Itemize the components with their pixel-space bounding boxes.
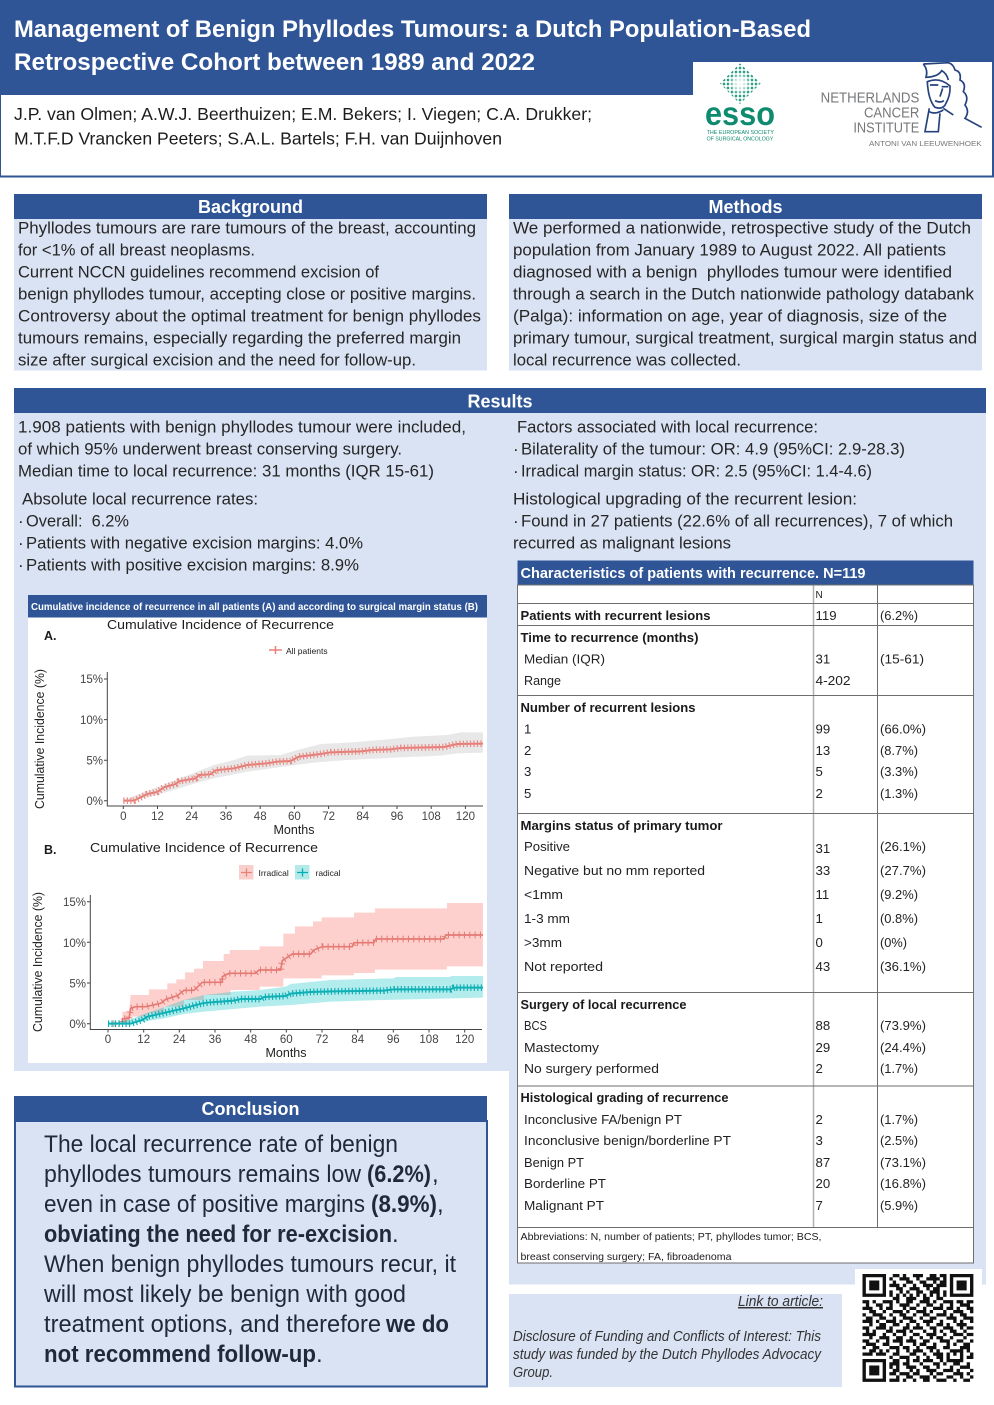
header band [0,0,994,176]
chart A: 84 [356,811,370,823]
table abbreviations: Abbreviations: N, number of patients; PT, phyllodes tumor; BCS, [520,1231,822,1243]
conclusion text [43,1131,456,1368]
background text: Controversy about the optimal treatment for benign phyllodes [18,307,481,326]
table group: surgery: (73.9%) [880,1018,926,1033]
table group: surgery: (24.4%) [880,1040,926,1055]
table group: margin status: 31 [816,841,830,856]
table group: surgery: Surgery of local recurrence [520,997,686,1012]
table group: histological grading: Malignant PT [524,1198,604,1213]
table group: number of recurrent lesions: 99 [816,722,830,736]
logo: Netherlands Cancer Institute [821,63,982,148]
table row: header and total: Patients with recurrent lesions [520,608,710,623]
chart A: 48 [254,811,267,823]
table group: surgery: No surgery performed [524,1061,659,1076]
legend: margin status [239,865,341,880]
link to article: Link to article: [738,1294,823,1310]
methods text: local recurrence was collected. [513,351,741,370]
table group: margin status: Margins status of primary tumor [520,818,722,833]
chart A: 0% [86,796,103,808]
chart heading [28,595,487,618]
table group: surgery: (1.7%) [880,1061,918,1076]
chart B: 84 [351,1034,365,1046]
conclusion text: phyllodes tumours remains low [44,1161,362,1188]
table group: time to recurrence: Median (IQR) [524,652,605,666]
results text: absolute recurrence rates: Overall: 6.2% [26,512,129,531]
methods text [513,219,977,370]
table group: histological grading: 7 [816,1198,823,1213]
table group: histological grading: 2 [816,1112,823,1127]
background text [18,219,481,370]
chart A: Cumulative Incidence of Recurrence [107,617,334,632]
methods heading: Methods [708,197,782,217]
results text: absolute recurrence rates: Patients with positive excision margins: 8.9% [26,556,359,575]
logo: Netherlands Cancer Institute: ANTONI VAN LEEUWENHOEK [869,139,982,148]
table row: header and total: (6.2%) [880,608,918,623]
conclusion text: , [437,1191,444,1218]
table group: margin status: (9.2%) [880,887,918,902]
table abbreviations [520,1231,822,1263]
chart B: 48 [244,1034,257,1046]
methods text: diagnosed with a benign phyllodes tumour were identified [513,263,952,282]
results text: histological upgrading: Histological upgrading of the recurrent lesion: [513,490,857,509]
chart A: 24 [185,811,199,823]
results text: factors: · [513,462,519,481]
methods text: population from January 1989 to August 2022. All patients [513,241,946,260]
chart B: 12 [137,1034,150,1046]
results text: factors: Irradical margin status: OR: 2.5 (95%CI: 1.4-4.6) [521,462,872,481]
table group: number of recurrent lesions: 2 [524,743,531,758]
table group: surgery: BCS [524,1018,547,1033]
logo: Netherlands Cancer Institute: CANCER [864,105,919,121]
table group: margin status: (26.1%) [880,839,926,854]
title: Management of Benign Phyllodes Tumours: a Dutch Population-Based [14,16,811,43]
table group: number of recurrent lesions: 1 [524,722,531,736]
chart A: A. [44,629,56,643]
conclusion heading: Conclusion [202,1099,300,1119]
chart A: 5% [86,756,103,768]
background text: benign phyllodes tumour, accepting close or positive margins. [18,285,476,304]
results text: absolute recurrence rates: Absolute local recurrence rates: [22,490,258,509]
background text: size after surgical excision and the need for follow-up. [18,351,416,370]
table group: surgery: 2 [816,1061,823,1076]
table group: margin status: >3mm [524,935,562,950]
results text: cohort: Median time to local recurrence: 31 months (IQR 15-61) [18,462,434,481]
table group: histological grading: 3 [816,1133,823,1148]
chart B: 60 [280,1034,293,1046]
chart A: 10% [80,715,103,727]
results text: factors: Bilaterality of the tumour: OR: 4.9 (95%CI: 2.9-28.3) [521,440,905,459]
table group: number of recurrent lesions: (3.3%) [880,764,918,779]
table group: number of recurrent lesions: (66.0%) [880,722,926,736]
chart B: 96 [387,1034,400,1046]
results text: absolute recurrence rates: · [18,556,24,575]
results text: histological upgrading [513,490,953,553]
results text: histological upgrading: Found in 27 patients (22.6% of all recurrences), 7 of which [521,512,953,531]
chart B: 0 [105,1034,111,1046]
chart A: 96 [391,811,403,823]
panel: results [14,388,986,1284]
chart A: 120 [456,811,475,823]
table group: margin status: <1mm [524,887,563,902]
results text: histological upgrading: · [513,512,519,531]
table group: time to recurrence: 31 [816,652,830,666]
methods text: through a search in the Dutch nationwide pathology databank [513,285,974,304]
table group: surgery: 88 [816,1018,830,1033]
chart B: 120 [455,1034,474,1046]
legend: margin status: Irradical [258,868,289,878]
table group: margin status: Negative but no mm reported [524,863,705,878]
table group: number of recurrent lesions: 5 [816,764,823,779]
QR code [855,1269,982,1389]
conclusion text: When benign phyllodes tumours recur, it [44,1251,456,1278]
table heading: Characteristics of patients with recurrence. N=119 [520,565,866,582]
chart B: Months [266,1046,306,1060]
table group: histological grading [520,1090,926,1213]
conclusion text: obviating the need for re-excision [44,1221,392,1248]
chart B: Cumulative Incidence (%) [31,892,45,1032]
results text: cohort [18,418,466,481]
conclusion text: (8.9%) [371,1191,437,1218]
table group: number of recurrent lesions: 3 [524,764,531,779]
table group: margin status: 0 [816,935,823,950]
table group: time to recurrence: Range [524,673,561,688]
table group: margin status: (0%) [880,935,907,950]
logo: ESSO: esso [705,96,775,133]
panel: methods [509,194,982,370]
results heading [14,388,986,413]
conclusion text: The local recurrence rate of benign [44,1131,398,1158]
disclosure text: Disclosure of Funding and Conflicts of Interest: This [513,1329,821,1345]
table group: histological grading: Borderline PT [524,1176,606,1191]
chart A: 12 [151,811,164,823]
chart A: 15% [80,674,103,686]
conclusion text: we do [385,1311,449,1338]
logo: ESSO: OF SURGICAL ONCOLOGY [707,137,774,143]
table group: margin status: 1 [816,911,823,926]
table group: histological grading: Benign PT [524,1155,584,1170]
chart A [33,617,483,837]
conclusion text: . [392,1221,399,1248]
results text: absolute recurrence rates: · [18,534,24,553]
table group: time to recurrence [520,630,924,688]
background heading: Background [198,197,303,217]
table group: margin status [520,818,926,974]
table group: histological grading: Inconclusive FA/benign PT [524,1112,682,1127]
table group: margin status: 11 [816,887,829,902]
disclosure text: Group. [513,1365,553,1381]
table group: margin status: (36.1%) [880,959,926,974]
chart A: 108 [422,811,441,823]
conclusion text: will most likely be benign with good [43,1281,406,1308]
table group: number of recurrent lesions: 2 [816,786,823,801]
table row: header and total: N [816,590,823,601]
chart B: 5% [69,978,86,990]
methods text: (Palga): information on age, year of diagnosis, size of the [513,307,947,326]
conclusion text: (6.2%) [367,1161,431,1188]
chart B: B. [44,843,56,857]
table group: margin status: 43 [816,959,830,974]
table group: number of recurrent lesions [520,700,926,801]
background text: Current NCCN guidelines recommend excision of [18,263,379,282]
results text: cohort: of which 95% underwent breast conserving surgery. [18,440,402,459]
table group: margin status: 1-3 mm [524,911,570,926]
results text: factors: Factors associated with local recurrence: [517,418,818,437]
table group: histological grading: (16.8%) [880,1176,926,1191]
chart A: 36 [220,811,232,823]
panel: conclusion [14,1096,487,1386]
chart A: Months [274,823,314,837]
results text: factors: · [513,440,519,459]
chart B: 15% [63,897,86,909]
table group: histological grading: Histological grading of recurrence [520,1090,728,1105]
conclusion text: even in case of positive margins [44,1191,365,1218]
chart A: 72 [322,811,335,823]
legend: all patients: All patients [286,646,328,656]
authors [14,104,592,148]
chart B: 10% [63,938,86,950]
table group: number of recurrent lesions: Number of recurrent lesions [520,700,696,715]
table group: surgery: Mastectomy [524,1040,599,1055]
logo: Netherlands Cancer Institute: INSTITUTE [853,120,919,136]
authors: M.T.F.D Vrancken Peeters; S.A.L. Bartels; F.H. van Duijnhoven [14,128,502,148]
results text: cohort: 1.908 patients with benign phyllodes tumour were included, [18,418,466,437]
panel: cumulative incidence charts [28,595,487,1063]
table group: histological grading: (5.9%) [880,1198,918,1213]
logo: ESSO: THE EUROPEAN SOCIETY [707,130,774,136]
chart B: 0% [69,1019,86,1031]
methods text: primary tumour, surgical treatment, surgical margin status and [513,329,977,348]
table group: histological grading: (1.7%) [880,1112,918,1127]
table group: margin status: Not reported [524,959,603,974]
conclusion text: treatment options, and therefore [44,1311,381,1338]
logo: ESSO [705,63,775,143]
table row: header and total: 119 [816,608,837,623]
table: characteristics of patients with recurrence [518,560,974,1263]
table group: number of recurrent lesions: (8.7%) [880,743,918,758]
chart B: 36 [209,1034,221,1046]
chart A: 60 [288,811,301,823]
table group: surgery: 29 [816,1040,830,1055]
methods text: We performed a nationwide, retrospective study of the Dutch [513,219,971,238]
disclosure text [513,1329,822,1381]
authors: J.P. van Olmen; A.W.J. Beerthuizen; E.M. Bekers; I. Viegen; C.A. Drukker; [14,104,592,124]
table abbreviations: breast conserving surgery; FA, fibroadenoma [520,1251,732,1263]
methods heading [509,194,982,219]
panel: disclosure and link [509,1294,842,1387]
table group: surgery [520,997,926,1076]
table group: margin status: (0.8%) [880,911,918,926]
results text: factors [513,418,905,481]
logo: Netherlands Cancer Institute: NETHERLANDS [821,90,920,106]
results text: histological upgrading: recurred as malignant lesions [513,534,731,553]
background text: Phyllodes tumours are rare tumours of the breast, accounting [18,219,476,238]
conclusion text: not recommend follow-up [44,1341,316,1368]
table heading [518,560,974,586]
table group: time to recurrence: (15-61) [880,652,924,666]
background heading [14,194,487,219]
table group: time to recurrence: 4-202 [816,673,850,688]
table group: margin status: (27.7%) [880,863,926,878]
background text: for <1% of all breast neoplasms. [18,241,255,260]
table group: margin status: 33 [816,863,830,878]
results text: absolute recurrence rates [18,490,363,575]
table group: number of recurrent lesions: 13 [816,743,830,758]
table group: histological grading: 87 [816,1155,830,1170]
table group: histological grading: (73.1%) [880,1155,926,1170]
disclosure text: study was funded by the Dutch Phyllodes Advocacy [513,1347,822,1363]
chart B: 108 [419,1034,439,1046]
background text: tumours remains, especially regarding the preferred margin [18,329,461,348]
chart B: 24 [173,1034,186,1046]
chart A: Cumulative Incidence (%) [33,669,47,809]
table group: histological grading: (2.5%) [880,1133,918,1148]
legend: margin status: radical [316,868,341,878]
table row: header and total [520,590,918,623]
chart A: 0 [120,811,127,823]
table group: histological grading: Inconclusive benign/borderline PT [524,1133,731,1148]
table group: number of recurrent lesions: 5 [524,786,531,801]
chart B: Cumulative Incidence of Recurrence [90,840,318,855]
title: Retrospective Cohort between 1989 and 2022 [14,49,535,76]
conclusion text: , [432,1161,439,1188]
table group: time to recurrence: Time to recurrence (months) [520,630,698,645]
results text: absolute recurrence rates: · [18,512,24,531]
chart heading: Cumulative incidence of recurrence in all patients (A) and according to surgical margin status (B) [31,601,478,613]
conclusion heading [14,1096,487,1122]
results text: absolute recurrence rates: Patients with negative excision margins: 4.0% [26,534,363,553]
title [14,16,811,76]
table group: number of recurrent lesions: (1.3%) [880,786,918,801]
results heading: Results [467,392,533,412]
chart B [31,840,483,1060]
table group: margin status: Positive [524,839,570,854]
chart B: 72 [316,1034,328,1046]
table group: histological grading: 20 [816,1176,830,1191]
conclusion text: . [316,1341,323,1368]
panel: background [14,194,487,370]
